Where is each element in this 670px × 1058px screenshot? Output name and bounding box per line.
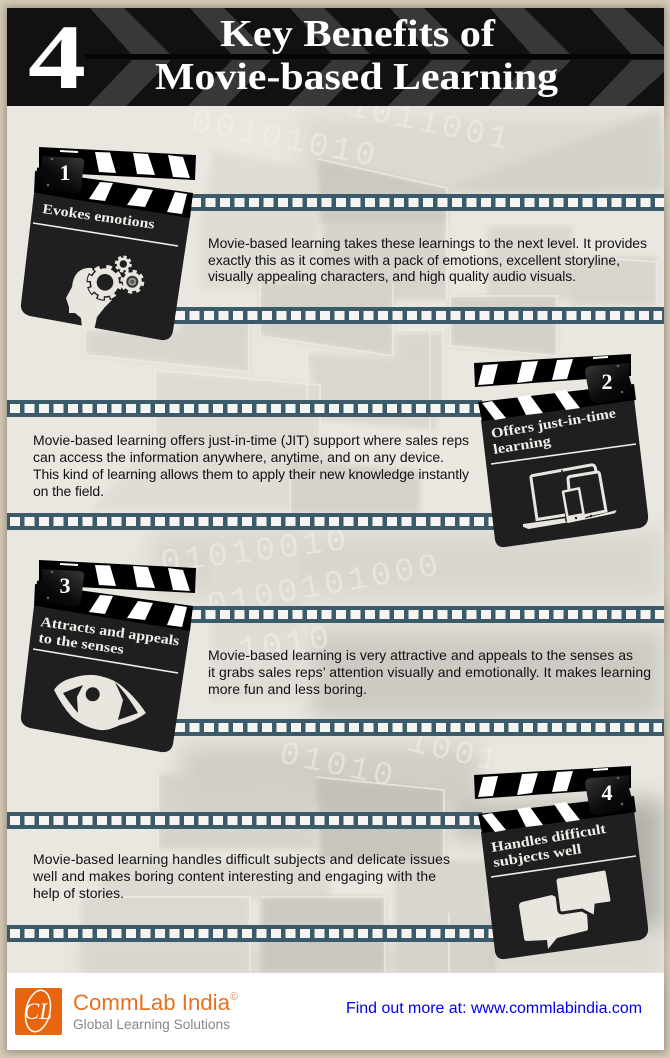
film strip 1 top [188,194,664,211]
text block: benefit 1: exactly this as it comes with a pack of emotions, excellent storyline, [208,252,620,268]
clapper board [21,193,190,340]
text block: benefit 4: Movie-based learning handles difficult subjects and delicate issues [33,851,450,867]
title: Key Benefits of [220,13,496,55]
film strip 2 bottom [7,513,497,530]
number 1: 1 [60,160,70,185]
card title: Offers just-in-time [490,406,617,442]
panel: benefit 2 clapperboard [474,354,648,547]
card title: learning [492,434,552,458]
panel: photo collage background: 1010 [236,620,336,670]
footer link: Find out more at: www.commlabindia.com [346,1000,642,1017]
clapper board [21,606,190,752]
rule [33,223,178,246]
logo mark: CL [24,999,52,1024]
text block: benefit 2: Movie-based learning offers just-in-time (JIT) support where sales reps [33,432,469,448]
number 4: 4 [602,780,612,805]
text block: benefit 4: well and makes boring content interesting and engaging with the [32,868,436,884]
number 3: 3 [60,573,70,598]
card title: Handles difficult [490,822,607,856]
card title: Attracts and appeals [39,615,181,650]
card title: to the senses [37,631,125,658]
hinge badge [585,775,635,815]
text block: benefit 3: more fun and less boring. [208,681,367,697]
icon: eye [54,675,146,730]
text block: benefit 2: This kind of learning allows them to apply their new knowledge instantly [33,466,469,482]
logo mark [15,988,62,1035]
number 2: 2 [602,369,612,394]
clapper stick [39,147,196,180]
film strip 2 top [7,400,482,417]
text block: benefit 3: it grabs sales reps’ attention visually and emotionally. It makes learning [208,664,651,680]
clapper band [34,584,193,631]
icon: devices [523,465,617,529]
text block: benefit 1: visually appealing characters, and high quality audio visuals. [208,268,576,284]
logo name: CommLab India [73,990,231,1015]
icon: head with gears [66,257,142,331]
film strip 4 top [7,812,482,829]
card title: Evokes emotions [41,202,156,233]
card title [490,406,617,458]
clapper board [481,810,648,959]
title [155,13,558,98]
clapper stick [474,766,631,799]
logo tagline: Global Learning Solutions [73,1017,230,1032]
clapper board [481,398,648,547]
rule [491,444,636,464]
panel: photo collage background: 1011001 [345,89,516,159]
panel: benefit 4 clapperboard [474,766,648,959]
footer bar [7,973,664,1050]
clapper band [478,796,636,833]
header bar [7,6,664,108]
big numeral 4: 4 [28,6,86,108]
film strip 4 bottom [7,925,497,942]
panel: photo collage background: 01010010 [159,522,352,582]
hinge badge [35,569,84,606]
clapper stick [39,560,196,593]
text block: benefit 2: can access the information anywhere, anytime, and on any device. [33,449,444,465]
panel: photo collage background: 01010 [276,736,400,797]
icon: speech bubbles [519,869,612,949]
film strip 3 bottom [172,719,664,736]
rule [33,649,178,673]
text block: benefit 3: Movie-based learning is very attractive and appeals to the senses as [208,647,633,663]
clapper band [34,171,193,218]
panel: benefit 3 clapperboard [21,560,196,752]
hinge badge [585,363,635,403]
logo copyright mark: © [230,991,238,1003]
rule [491,856,636,877]
clapper band [478,384,636,421]
panel: benefit 1 clapperboard [21,147,196,340]
panel: photo collage background: 1001 [404,724,505,781]
film strip 1 bottom [172,307,664,324]
panel: photo collage background: 00101010 [188,103,382,176]
text block: benefit 2: on the field. [33,483,104,499]
card title: subjects well [492,842,583,871]
hinge badge [35,156,84,193]
text block: benefit 1: Movie-based learning takes these learnings to the next level. It provides [208,235,647,251]
card title [490,822,607,871]
card title [37,615,181,658]
film strip 3 top [188,606,664,623]
text block: benefit 4: help of stories. [33,885,124,901]
panel: photo collage background: 0100101000 [204,547,445,625]
title: Movie-based Learning [155,56,558,98]
clapper stick [474,354,631,387]
